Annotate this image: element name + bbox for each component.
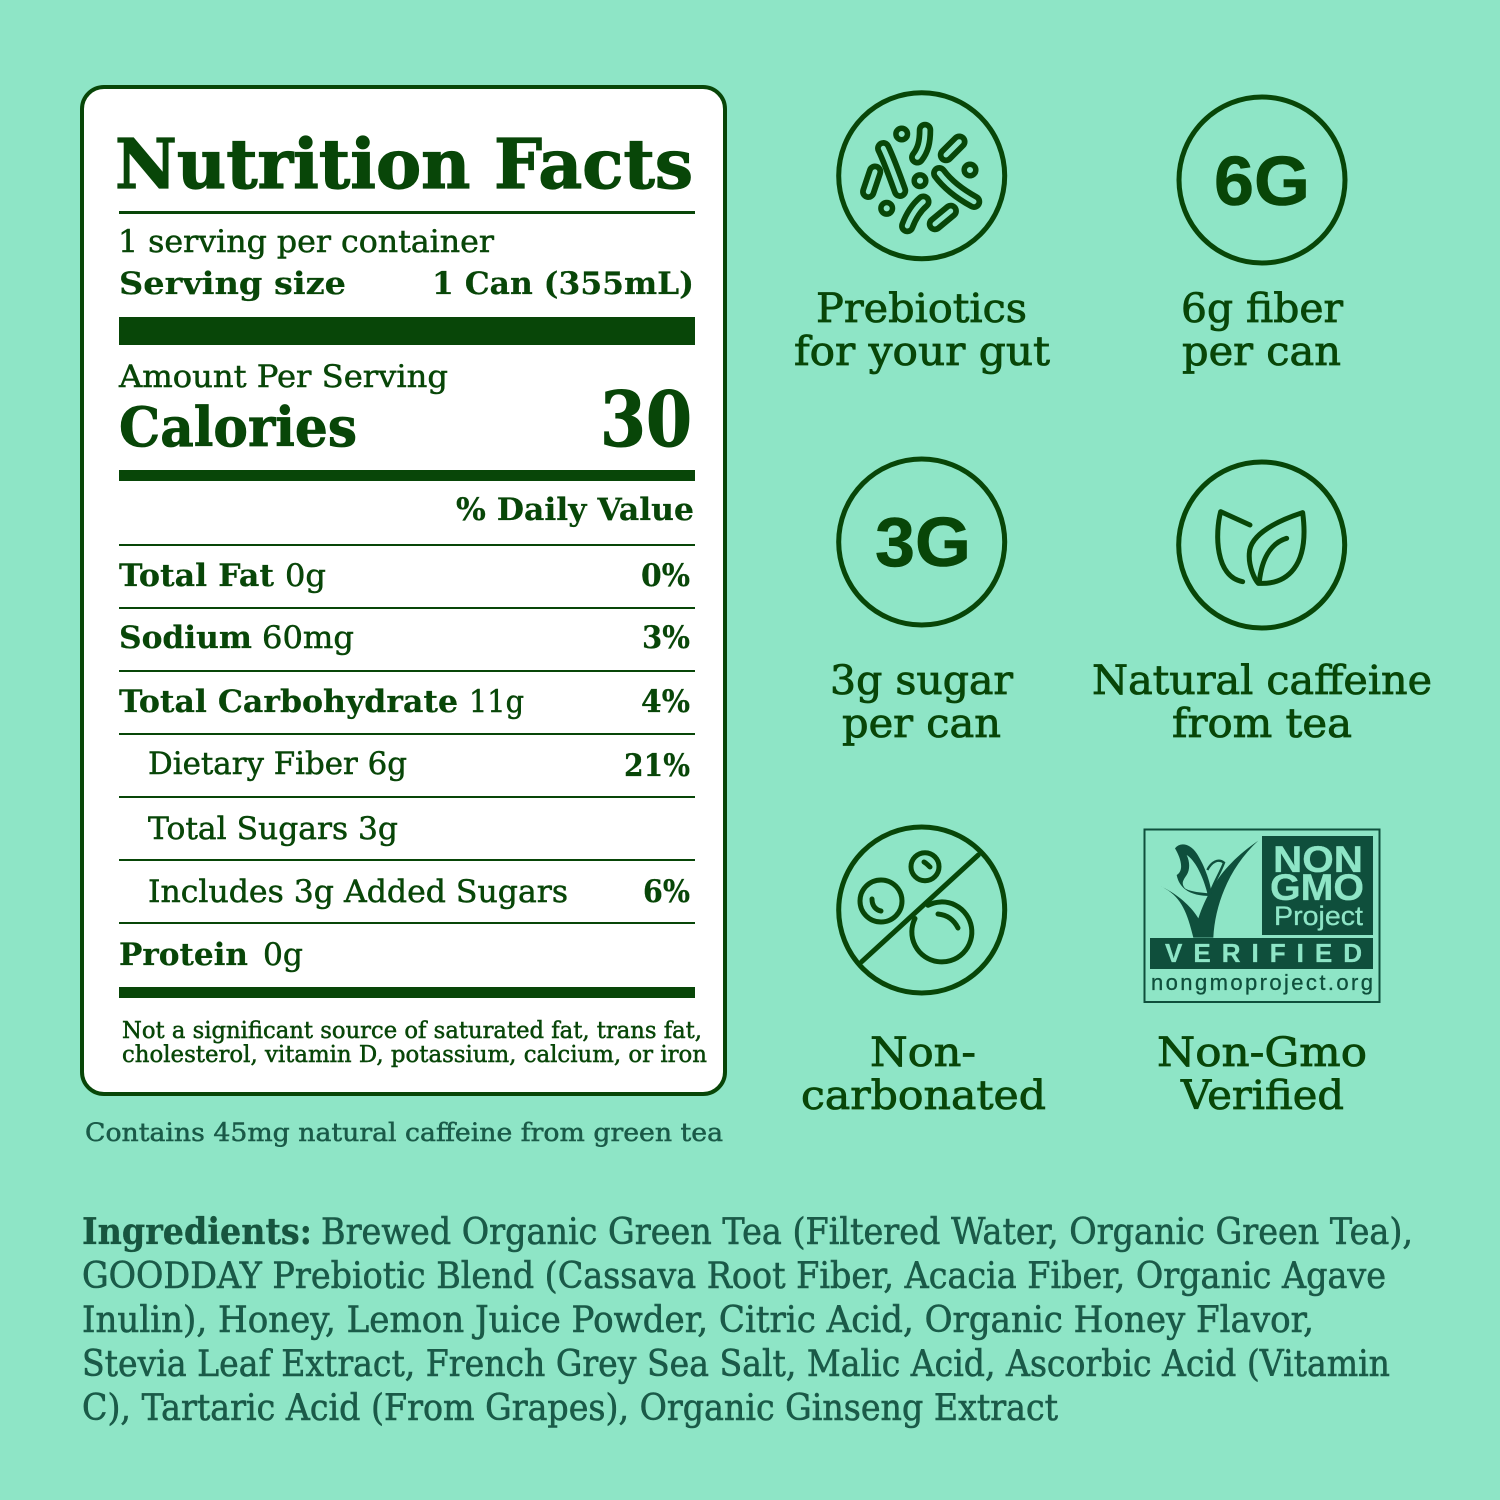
label: sugar: 3g sugar bbox=[830, 658, 1014, 704]
serving information: Serving size bbox=[119, 266, 346, 302]
nutrient rows bbox=[119, 558, 690, 973]
nutrient rows: Total Fat bbox=[119, 558, 275, 594]
label: sugar bbox=[830, 658, 1014, 747]
label: caffeine: Natural caffeine bbox=[1092, 658, 1432, 704]
footnote: cholesterol, vitamin D, potassium, calcium, or iron bbox=[122, 1042, 707, 1068]
icon: Non-GMO Project badge: VERIFIED bbox=[1165, 938, 1362, 968]
icon: 3G: 3G bbox=[875, 503, 971, 581]
nutrient rows: 0g bbox=[263, 937, 303, 973]
icon: 6G bbox=[1179, 97, 1345, 263]
label: non-carbonated: carbonated bbox=[801, 1073, 1046, 1119]
icon: Non-GMO Project badge: nongmoproject.org bbox=[1151, 970, 1373, 995]
nutrient rows: 6% bbox=[643, 874, 690, 910]
label: fiber: 6g fiber bbox=[1181, 286, 1344, 332]
nutrient rows: Total Sugars 3g bbox=[148, 811, 398, 847]
label: non-GMO: Non-Gmo bbox=[1157, 1030, 1367, 1076]
calories block bbox=[118, 359, 692, 464]
icon: non-carbonated bubbles bbox=[839, 827, 1005, 993]
icon: Non-GMO Project badge bbox=[1144, 830, 1380, 1002]
label: non-GMO: Verified bbox=[1180, 1073, 1344, 1119]
serving information bbox=[118, 224, 694, 302]
label: fiber bbox=[1181, 286, 1344, 375]
label: caffeine bbox=[1092, 658, 1432, 747]
footnote bbox=[122, 1018, 707, 1068]
heading: Nutrition Facts: Nutrition Facts bbox=[115, 125, 693, 205]
icon: Non-GMO Project badge: NON bbox=[1273, 839, 1363, 880]
calories block: Amount Per Serving bbox=[118, 359, 448, 395]
ingredients text: Stevia Leaf Extract, French Grey Sea Salt, Malic Acid, Ascorbic Acid (Vitamin bbox=[82, 1344, 1390, 1385]
serving information: 1 serving per container bbox=[118, 224, 494, 260]
nutrient rows: 11g bbox=[469, 684, 524, 720]
ingredients text: GOODDAY Prebiotic Blend (Cassava Root Fiber, Acacia Fiber, Organic Agave bbox=[82, 1256, 1386, 1297]
ingredients text: Brewed Organic Green Tea (Filtered Water, Organic Green Tea), bbox=[321, 1212, 1413, 1253]
nutrient rows: Sodium bbox=[119, 620, 252, 656]
icon: tea leaves bbox=[1179, 462, 1345, 628]
icon: prebiotics bacteria bbox=[839, 93, 1005, 259]
label: prebiotics: Prebiotics bbox=[816, 286, 1027, 332]
caffeine note: Contains 45mg natural caffeine from green tea bbox=[85, 1118, 723, 1147]
ingredients text: C), Tartaric Acid (From Grapes), Organic Ginseng Extract bbox=[82, 1388, 1058, 1429]
nutrient rows: 0g bbox=[285, 558, 326, 594]
icon: 6G: 6G bbox=[1214, 142, 1310, 220]
nutrient rows: Protein bbox=[119, 937, 248, 973]
label: caffeine: from tea bbox=[1172, 701, 1352, 747]
icon: Non-GMO Project badge: Project bbox=[1274, 901, 1364, 931]
footnote: Not a significant source of saturated fat, trans fat, bbox=[122, 1018, 702, 1044]
calories block: Calories bbox=[119, 395, 357, 459]
nutrient rows: Includes 3g Added Sugars bbox=[148, 874, 568, 910]
label: sugar: per can bbox=[842, 701, 1001, 747]
label: prebiotics bbox=[794, 286, 1050, 375]
icon: 3G bbox=[839, 459, 1005, 625]
panel: nutrition facts label bbox=[82, 87, 725, 1094]
ingredients text: Ingredients: bbox=[82, 1211, 312, 1253]
serving information: 1 Can (355mL) bbox=[432, 266, 694, 302]
label: fiber: per can bbox=[1182, 329, 1341, 375]
icon: Non-GMO Project badge: GMO bbox=[1270, 867, 1364, 908]
nutrient rows: 3% bbox=[642, 620, 690, 656]
ingredients text bbox=[82, 1211, 1413, 1429]
nutrient rows: Dietary Fiber 6g bbox=[148, 746, 407, 782]
label: prebiotics: for your gut bbox=[794, 329, 1050, 375]
nutrient rows: 21% bbox=[624, 748, 690, 784]
nutrient rows: 4% bbox=[641, 684, 690, 720]
label: non-GMO bbox=[1157, 1030, 1367, 1119]
label: non-carbonated bbox=[801, 1030, 1046, 1119]
nutrient rows: 60mg bbox=[262, 620, 354, 656]
daily value heading: % Daily Value bbox=[456, 492, 694, 528]
nutrient rows: 0% bbox=[641, 558, 690, 594]
label: non-carbonated: Non- bbox=[870, 1030, 976, 1076]
nutrient rows: Total Carbohydrate bbox=[119, 684, 458, 720]
ingredients text: Inulin), Honey, Lemon Juice Powder, Citric Acid, Organic Honey Flavor, bbox=[82, 1300, 1314, 1341]
calories block: 30 bbox=[600, 375, 692, 464]
